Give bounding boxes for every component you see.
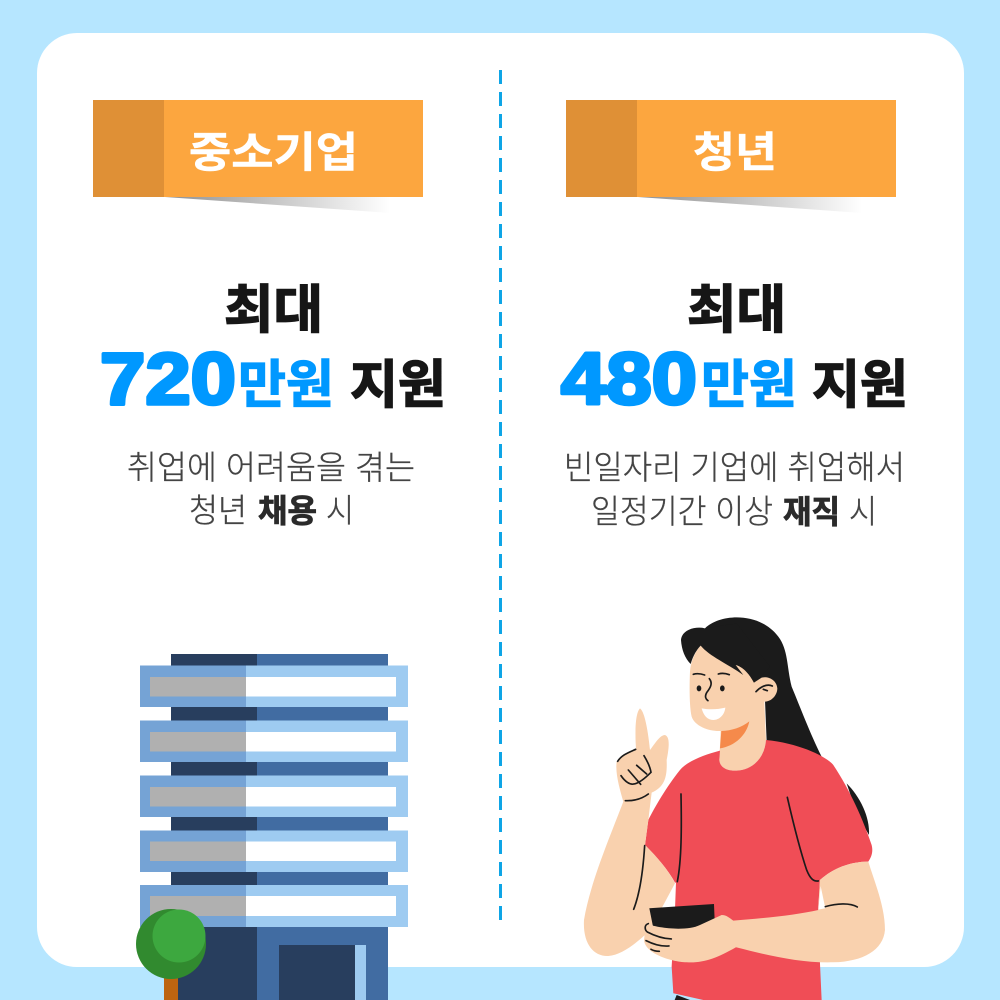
right arm and hand — [644, 862, 885, 962]
description: youth condition — [564, 449, 905, 530]
description: small business condition: 시 — [326, 492, 354, 529]
heading: max amount label: 최대 — [224, 282, 323, 340]
description: small business condition: 취업에 어려움을 겪는 — [127, 449, 415, 486]
heading: 720 amount — [100, 339, 446, 420]
center dashed divider — [499, 70, 502, 920]
hair bangs — [681, 623, 770, 683]
description: youth condition: 재직 — [783, 494, 840, 530]
heading: 480 amount: 만원 — [701, 357, 797, 415]
description: youth condition: 일정기간 이상 — [591, 493, 773, 530]
heading: max amount label: 최대 — [687, 282, 786, 340]
heading: 720 amount: 720 — [100, 339, 236, 420]
phone — [649, 904, 715, 930]
heading: 480 amount: 480 — [561, 339, 697, 420]
heading: 480 amount — [561, 339, 908, 420]
panel: youth — [561, 100, 908, 1000]
shirt — [645, 740, 872, 1000]
ribbon: small business heading — [93, 100, 423, 213]
description: small business condition: 채용 — [258, 493, 317, 529]
skin: face and neck — [690, 646, 777, 771]
eyes — [697, 685, 725, 691]
ribbon: small business heading: 중소기업 — [189, 129, 358, 176]
illustration: woman with phone — [584, 617, 885, 1000]
heading: 720 amount: 만원 — [238, 357, 334, 415]
hair back — [705, 617, 822, 757]
description: youth condition: 시 — [849, 493, 877, 530]
neck shadow — [720, 721, 749, 748]
panel: small business — [93, 100, 446, 1000]
icon: tree — [136, 909, 206, 1000]
face and body line details — [618, 673, 857, 951]
heading: 480 amount: 지원 — [812, 357, 908, 415]
description: small business condition — [127, 449, 415, 529]
ribbon: youth heading: 청년 — [693, 129, 777, 176]
description: youth condition: 빈일자리 기업에 취업해서 — [564, 449, 905, 486]
left arm and hand — [584, 708, 675, 956]
mouth — [702, 708, 725, 720]
icon: office building — [140, 654, 408, 1000]
ribbon: youth heading — [566, 100, 896, 213]
heading: 720 amount: 지원 — [350, 357, 446, 415]
armpit gap — [818, 886, 825, 910]
description: small business condition: 청년 — [189, 492, 247, 529]
